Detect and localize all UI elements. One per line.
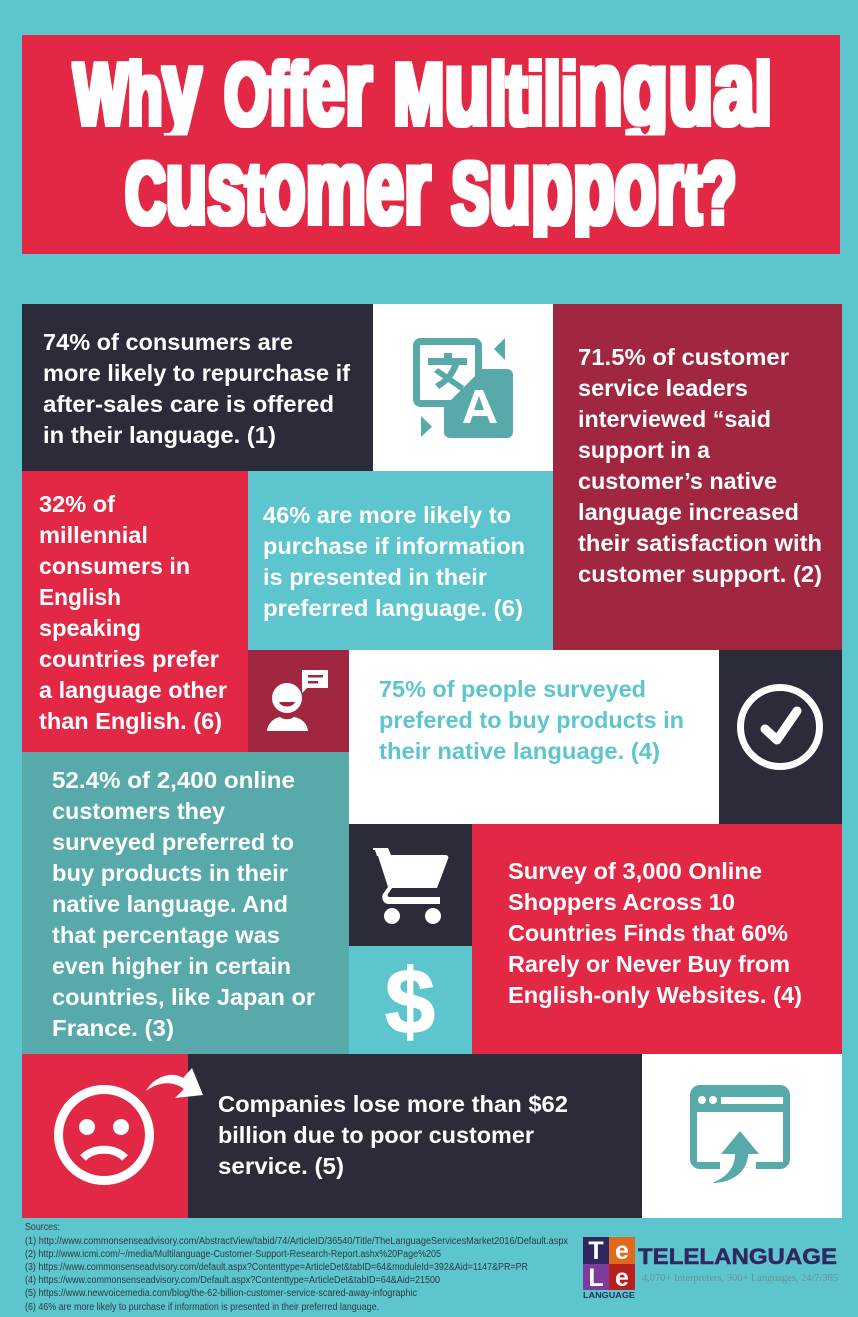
panel: 74% repurchase: in their language. (1) [43,422,276,448]
icon: translate [416,338,513,438]
sources text: (4) https://www.commonsenseadvisory.com/Default.aspx?Contenttype=ArticleDet&tabID=64&Aid=21500 [25,1275,440,1286]
panel: translate icon [373,304,553,471]
panel: 46% purchase: preferred language. (6) [263,595,523,621]
sources text: (5) https://www.newvoicemedia.com/blog/the-62-billion-customer-service-scared-away-infographic [25,1288,417,1299]
panel: 52.4% online customers: surveyed preferred to [52,829,294,855]
icon: person speaking [267,670,328,731]
panel: 74% repurchase: 74% of consumers are [43,329,293,355]
panel: 71.5% service leaders: support in a [578,437,711,463]
logo: Telelanguage: L [588,1264,604,1292]
logo: Telelanguage: TELELANGUAGE [638,1244,837,1269]
panel: 52.4% online customers: native language. And [52,891,288,917]
logo: Telelanguage: LANGUAGE [583,1291,636,1300]
panel: 74% repurchase: more likely to repurchase if [43,360,350,386]
panel: 32% millennial: English [39,584,121,610]
panel: 32% millennial: than English. (6) [39,708,222,734]
panel: sad face [22,1054,203,1218]
panel: 71.5% service leaders: customer’s native [578,468,777,494]
panel: 32% millennial: 32% of [39,491,115,517]
panel: 52.4% online customers: customers they [52,798,225,824]
panel: $62 billion: billion due to poor customer [218,1122,534,1148]
panel: dollar sign [349,946,472,1054]
panel: 60% survey: English-only Websites. (4) [508,982,802,1008]
panel: browser icon [642,1054,842,1218]
panel: 71.5% service leaders: service leaders [578,375,748,401]
panel: 60% survey: Shoppers Across 10 [508,889,735,915]
panel: 75% native language: prefered to buy products in [379,707,684,733]
sources text: Sources: [25,1222,60,1233]
icon: shopping cart [373,848,448,924]
panel: 46% purchase [248,471,553,650]
panel: $62 billion [188,1054,642,1218]
panel: 52.4% online customers [22,752,349,1054]
panel: 32% millennial: millennial [39,522,148,548]
sources text: (3) https://www.commonsenseadvisory.com/default.aspx?Contenttype=ArticleDet&tabID=64&moduleId=392&Aid=1147&PR=PR [25,1262,528,1273]
title banner: Support? [452,128,736,247]
panel: 71.5% service leaders: their satisfaction with [578,530,822,556]
sources text: (6) 46% are more likely to purchase if information is presented in their preferred language. [25,1302,379,1313]
logo: Telelanguage: e [615,1237,629,1265]
panel: 60% survey: Rarely or Never Buy from [508,951,790,977]
panel: 32% millennial: countries prefer [39,646,219,672]
panel: 71.5% service leaders: language increased [578,499,799,525]
panel: 46% purchase: 46% are more likely to [263,502,511,528]
title banner: Why [74,28,201,148]
panel: 52.4% online customers: 52.4% of 2,400 online [52,767,295,793]
icon: dollar sign: $ [385,951,435,1053]
panel: 32% millennial: consumers in [39,553,190,579]
panel: 52.4% online customers: buy products in their [52,860,288,886]
panel: 71.5% service leaders: 71.5% of customer [578,344,789,370]
logo: Telelanguage [583,1237,838,1300]
panel: 74% repurchase: after-sales care is offered [43,391,334,417]
icon: browser with arrow [690,1085,790,1183]
title banner: Offer [224,28,372,148]
panel: 75% native language [349,650,719,824]
icon: checkmark [740,688,820,766]
panel: 60% survey: Survey of 3,000 Online [508,858,762,884]
panel: speaker icon [248,650,349,752]
panel: 32% millennial: a language other [39,677,227,703]
panel: 60% survey [472,824,842,1054]
sources text: (1) http://www.commonsenseadvisory.com/AbstractView/tabid/74/ArticleID/36540/Title/TheLanguageServicesMarket2016/Default.aspx [25,1236,568,1247]
panel: 52.4% online customers: that percentage was [52,922,280,948]
title banner: Customer [125,128,431,247]
panel: checkmark [719,650,842,824]
logo: Telelanguage: e [615,1264,629,1292]
logo: Telelanguage: T [588,1237,604,1265]
panel: shopping cart [349,824,472,946]
panel: 32% millennial [22,471,248,752]
panel: 75% native language: 75% of people surveyed [379,676,646,702]
panel: 52.4% online customers: even higher in certain [52,953,291,979]
panel: 46% purchase: purchase if information [263,533,525,559]
arrow [146,1068,203,1098]
panel: 52.4% online customers: countries, like Japan or [52,984,315,1010]
panel: 71.5% service leaders: customer support. (2) [578,561,822,587]
panel: $62 billion: Companies lose more than $62 [218,1091,568,1117]
panel: 71.5% service leaders: interviewed “said [578,406,771,432]
panel: 74% repurchase [22,304,373,471]
sources text: (2) http://www.icmi.com/~/media/Multilanguage-Customer-Support-Research-Report.ashx%20Page%205 [25,1249,441,1260]
title banner: Multilingual [394,28,772,148]
panel: 71.5% service leaders [553,304,842,650]
icon: sad face [58,1090,150,1180]
panel: $62 billion: service. (5) [218,1153,344,1179]
panel: 75% native language: their native language. (4) [379,738,660,764]
panel: 52.4% online customers: France. (3) [52,1015,174,1041]
panel: 60% survey: Countries Finds that 60% [508,920,788,946]
panel: 46% purchase: is presented in their [263,564,487,590]
sources text [25,1222,568,1313]
panel: 32% millennial: speaking [39,615,141,641]
title banner [22,28,840,254]
logo: Telelanguage: 4,070+ Interpreters, 300+ Languages, 24/7/365 [642,1272,838,1284]
